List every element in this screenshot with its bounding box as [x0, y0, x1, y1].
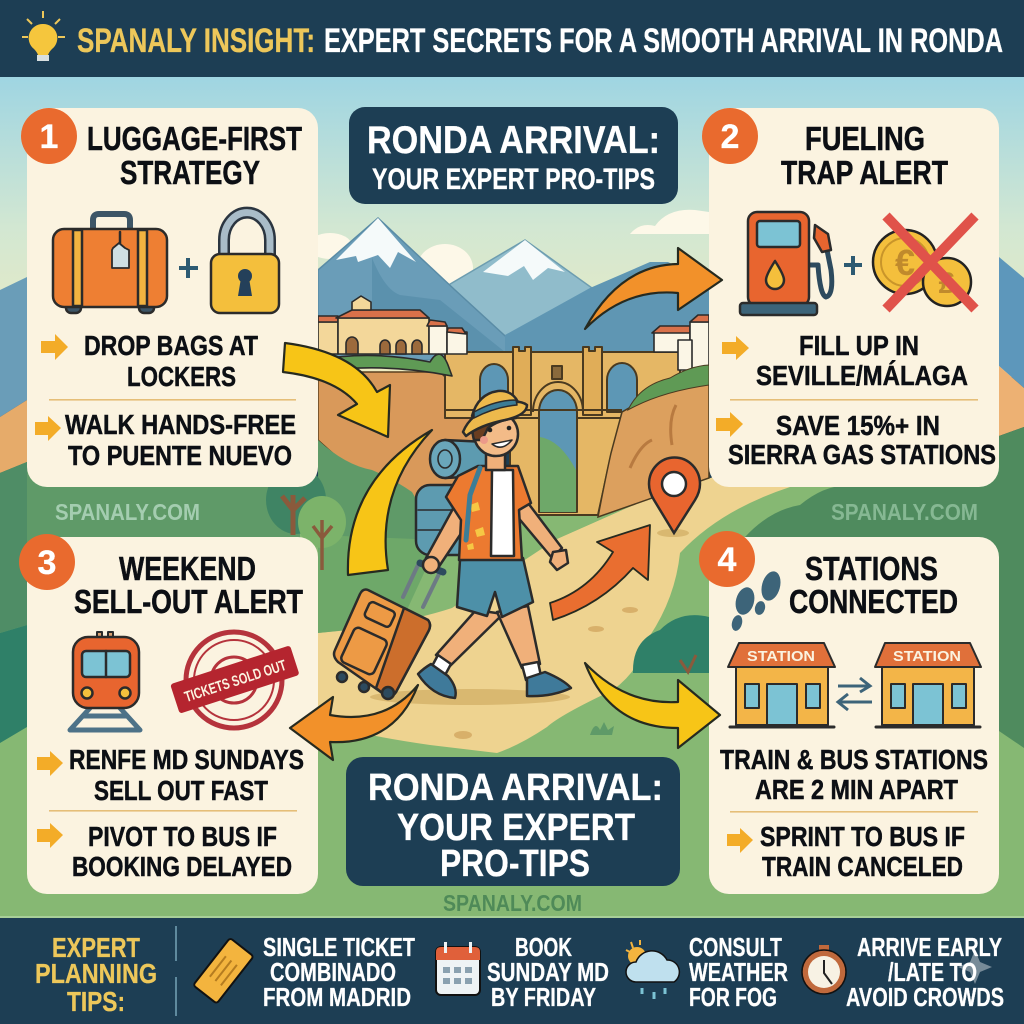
icon: stopwatch — [802, 945, 846, 994]
Puente Nuevo bridge — [445, 347, 680, 515]
arrow: orange to panel 2 — [585, 248, 722, 329]
title box: bottom: PRO-TIPS — [440, 843, 590, 885]
arms — [516, 495, 562, 558]
bullet arrow — [716, 412, 743, 437]
text: save fuel — [728, 410, 996, 470]
badge 2: 2 — [721, 118, 739, 156]
icon: padlock — [211, 213, 279, 313]
text: book sunday: SUNDAY MD — [487, 957, 609, 987]
text: arrive early: /LATE TO — [888, 957, 977, 987]
text: drop bags: DROP BAGS AT — [84, 330, 258, 361]
text: single ticket: SINGLE TICKET — [263, 932, 415, 962]
text: train and bus — [720, 744, 988, 805]
icon: plus — [179, 258, 198, 278]
heading — [74, 550, 303, 620]
text: single ticket: COMBINADO — [270, 957, 396, 987]
bullet arrow — [41, 334, 68, 360]
text: walk hands-free: WALK HANDS-FREE — [65, 409, 296, 440]
title box: top — [349, 107, 678, 204]
title box: bottom: YOUR EXPERT — [397, 807, 635, 849]
icon: weather cloud — [626, 940, 679, 999]
heading: LUGGAGE-FIRST — [87, 120, 302, 157]
text: fill up — [756, 330, 968, 391]
text: walk hands-free: TO PUENTE NUEVO — [68, 440, 292, 471]
heading — [87, 120, 302, 191]
shirt — [446, 466, 531, 560]
left cliff greenery — [318, 440, 440, 540]
icon: fuel pump — [740, 212, 832, 315]
arrow: yellow to traveller — [283, 343, 390, 437]
text: consult weather: CONSULT — [689, 932, 782, 962]
panel 2: fueling trap alert — [702, 108, 999, 487]
icon: station left: STATION — [747, 649, 815, 665]
footer heading: EXPERT — [52, 932, 140, 963]
head — [486, 450, 505, 470]
heading — [789, 550, 958, 620]
text: consult weather — [689, 932, 788, 1012]
legs — [436, 610, 503, 666]
arrow: yellow crescent — [348, 430, 432, 575]
footer heading: PLANNING — [35, 958, 157, 989]
text: save fuel: SAVE 15%+ IN — [776, 410, 940, 441]
badge 4: 4 — [718, 541, 737, 579]
text: single ticket — [263, 932, 415, 1012]
backpack — [416, 440, 491, 555]
title box: bottom: RONDA ARRIVAL: — [368, 767, 663, 809]
badge 2 — [702, 108, 758, 164]
text: pivot: BOOKING DELAYED — [72, 851, 292, 882]
heading: FUELING — [805, 120, 925, 157]
header title: SPANALY INSIGHT: — [77, 22, 315, 60]
stamp: tickets sold out: TICKETS SOLD OUT — [182, 657, 288, 706]
icon: station right: STATION — [893, 649, 961, 665]
suitcase — [334, 563, 443, 699]
sparkle watermark — [958, 950, 992, 984]
icon: station left — [728, 643, 835, 727]
Ronda town buildings — [318, 296, 709, 376]
text: fill up: FILL UP IN — [799, 330, 919, 361]
heading: STATIONS — [805, 550, 938, 587]
text: sprint: SPRINT TO BUS IF — [760, 821, 965, 852]
text: renfe: RENFE MD SUNDAYS — [69, 744, 304, 775]
text: train and bus: ARE 2 MIN APART — [755, 774, 958, 805]
bullet arrow — [722, 336, 749, 360]
panel 4: stations connected — [699, 531, 999, 894]
arrow: orange to panel 3 — [290, 685, 418, 760]
text: arrive early — [846, 932, 1004, 1012]
text: single ticket: FROM MADRID — [263, 982, 411, 1012]
text: sprint — [760, 821, 965, 882]
shorts — [457, 558, 533, 617]
heading: TRAP ALERT — [781, 154, 948, 191]
title box: bottom — [346, 757, 680, 886]
heading — [781, 120, 948, 191]
panel 1: luggage-first strategy — [21, 108, 318, 487]
location pin — [649, 457, 700, 537]
title box: top: RONDA ARRIVAL: — [367, 119, 660, 162]
heading: SELL-OUT ALERT — [74, 583, 303, 620]
bullet arrow — [37, 751, 63, 776]
title box: top: YOUR EXPERT PRO-TIPS — [372, 163, 655, 196]
icon: lightbulb — [22, 11, 65, 61]
bullet arrow — [37, 823, 63, 848]
icon: crossed-out coins — [873, 216, 975, 309]
heading: STRATEGY — [120, 154, 260, 191]
badge 1 — [21, 108, 77, 164]
left cliff — [318, 372, 500, 525]
text: drop bags: LOCKERS — [127, 361, 236, 392]
heading: CONNECTED — [789, 583, 958, 620]
icon: suitcase — [53, 214, 167, 313]
bullet arrow — [35, 416, 61, 441]
icon: crossed-out coins: € — [895, 242, 915, 283]
icon: train — [70, 632, 140, 730]
text: book sunday: BOOK — [515, 932, 572, 962]
right cliff — [598, 365, 709, 517]
text: sprint: TRAIN CANCELED — [762, 851, 963, 882]
badge 3: 3 — [38, 544, 56, 582]
panel 3: weekend sell-out alert — [19, 534, 318, 894]
icon: ticket — [193, 938, 254, 1004]
arrow: yellow to panel 4 — [585, 663, 720, 748]
text: book sunday — [487, 932, 609, 1012]
icon: footprints — [730, 569, 784, 632]
arrow: orange-red to pin — [550, 525, 650, 620]
text: drop bags — [84, 330, 258, 392]
footer heading: TIPS: — [67, 986, 125, 1017]
text: renfe: SELL OUT FAST — [94, 775, 268, 806]
stamp: tickets sold out — [170, 632, 300, 728]
text: pivot: PIVOT TO BUS IF — [88, 821, 277, 852]
bullet arrow — [727, 828, 753, 853]
icon: exchange arrows — [838, 678, 872, 710]
watermark right: SPANALY.COM — [831, 499, 978, 525]
watermark left: SPANALY.COM — [55, 499, 200, 525]
badge 1: 1 — [40, 118, 58, 156]
trees — [266, 466, 346, 570]
icon: crossed-out coins: £ — [939, 267, 956, 300]
shoes — [418, 664, 456, 698]
hat — [463, 402, 527, 436]
badge 4 — [699, 531, 755, 587]
footer heading — [35, 932, 157, 1017]
icon: calendar — [436, 942, 480, 995]
header banner — [0, 0, 1024, 77]
text: consult weather: FOR FOG — [689, 982, 777, 1012]
text: consult weather: WEATHER — [689, 957, 788, 987]
text: renfe — [69, 744, 304, 806]
text: book sunday: BY FRIDAY — [491, 982, 596, 1012]
text: walk hands-free — [65, 409, 296, 471]
text: pivot — [72, 821, 292, 882]
footer band — [0, 916, 1024, 1024]
traveller character with suitcase — [334, 391, 571, 705]
icon: station right — [875, 643, 981, 727]
badge 3 — [19, 534, 75, 590]
text: fill up: SEVILLE/MÁLAGA — [756, 360, 968, 391]
watermark bottom: SPANALY.COM — [443, 890, 582, 916]
icon: plus — [844, 256, 862, 275]
heading: WEEKEND — [119, 550, 256, 587]
